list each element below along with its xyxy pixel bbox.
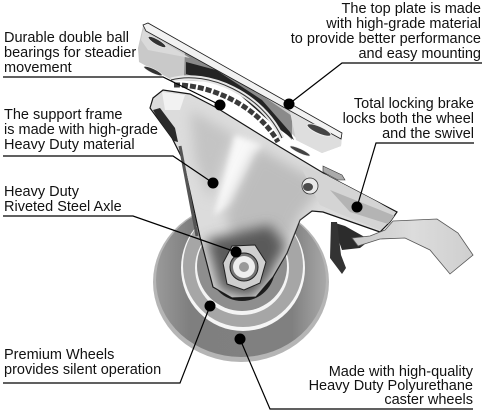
illustration: swivel caster wheel [138, 23, 473, 362]
callout: polyurethane wheels: caster wheels [384, 392, 473, 408]
callout: top plate: to provide better performance [291, 31, 481, 47]
callout: premium wheels: Premium Wheels [4, 347, 114, 363]
callout: top plate: The top plate is made [342, 1, 481, 17]
callout: ball bearings: movement [4, 60, 72, 76]
callout: polyurethane wheels [234, 334, 474, 409]
callout: riveted axle: Heavy Duty [4, 184, 80, 200]
callout: premium wheels [3, 300, 216, 383]
callout: ball bearings: bearings for steadier [4, 45, 136, 61]
callout: support frame: Heavy Duty material [4, 137, 135, 153]
callout: riveted axle: Riveted Steel Axle [4, 199, 122, 215]
callout: locking brake: locks both the wheel [343, 111, 474, 127]
callout: riveted axle [3, 184, 242, 258]
callout: polyurethane wheels: Heavy Duty Polyurethane [309, 378, 473, 394]
callout: support frame: The support frame [4, 107, 122, 123]
callout: polyurethane wheels: Made with high-quality [329, 364, 474, 380]
callout: locking brake: Total locking brake [354, 96, 474, 112]
callout: locking brake: and the swivel [382, 126, 474, 142]
callout: ball bearings: Durable double ball [4, 30, 129, 46]
locking brake lever [330, 219, 473, 274]
callout: locking brake [343, 96, 474, 212]
wheel [153, 202, 329, 362]
support frame [150, 90, 397, 298]
callout: top plate [284, 1, 482, 110]
callout: top plate: and easy mounting [358, 46, 481, 62]
callout: support frame [3, 107, 218, 188]
callout: premium wheels: provides silent operation [4, 362, 161, 378]
axle nut [223, 245, 266, 290]
top mounting plate [138, 23, 342, 158]
callout: ball bearings [3, 30, 226, 110]
callout: top plate: with high-grade material [325, 16, 481, 32]
callout: support frame: is made with high-grade [4, 122, 158, 138]
ball bearing race [171, 78, 282, 142]
